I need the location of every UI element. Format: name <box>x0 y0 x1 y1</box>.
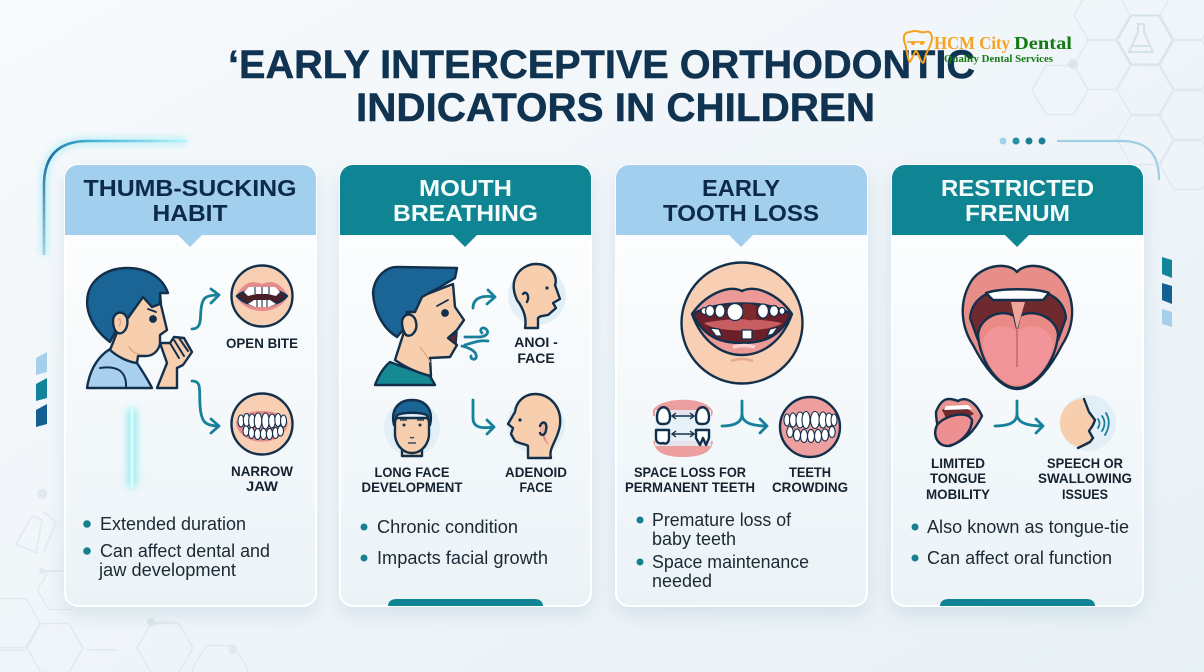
arrow to adenoid face <box>473 400 494 434</box>
panel: restricted frenum <box>892 165 1143 606</box>
header: early tooth loss <box>616 165 867 247</box>
header: restricted frenum <box>892 165 1143 247</box>
icon: mouth with missing teeth <box>682 262 802 384</box>
title: INDICATORS IN CHILDREN <box>356 86 875 130</box>
panel: early tooth loss: PERMANENT TEETH <box>625 479 755 495</box>
bullets: mouth breathing: Impacts facial growth <box>377 548 548 568</box>
bullets: thumb-sucking <box>83 514 270 580</box>
panel: restricted frenum: SWALLOWING <box>1038 470 1132 486</box>
icon: boy sucking thumb <box>87 268 192 388</box>
logo: HCM City Dental: HCM City <box>934 33 1010 53</box>
icon: speech profile <box>1060 395 1116 451</box>
bullets: restricted frenum: Also known as tongue-tie <box>927 517 1129 537</box>
label: long face development: LONG FACE <box>374 464 450 480</box>
header: mouth breathing: BREATHING <box>393 200 538 226</box>
decorative glow bar <box>128 408 136 488</box>
decorative dots and line <box>1000 138 1159 179</box>
panel: mouth breathing: DEVELOPMENT <box>362 479 463 495</box>
icon: adenoid face <box>507 394 565 458</box>
icon: breath lines <box>462 328 488 359</box>
bullets: early tooth loss: Space maintenance <box>652 552 809 572</box>
bullets: early tooth loss: Premature loss of <box>652 510 792 530</box>
logo: HCM City Dental: Dental <box>1014 33 1072 53</box>
label: speech or swallowing issues: SPEECH OR <box>1047 455 1123 471</box>
bullets: thumb-sucking: Can affect dental and <box>100 541 270 561</box>
icon: tongue and frenum <box>963 266 1072 389</box>
bullets: early tooth loss: needed <box>652 571 712 591</box>
title <box>228 43 975 130</box>
icon: teeth crowding <box>780 397 840 457</box>
arrow to anoi face <box>473 290 495 308</box>
icon: open bite mouth <box>232 266 292 326</box>
icon: long face <box>384 400 440 456</box>
label: anoi face: ANOI - <box>514 334 558 350</box>
bullets: restricted frenum <box>912 517 1129 568</box>
bullets: mouth breathing <box>360 517 548 568</box>
panel: mouth breathing: FACE <box>520 479 552 495</box>
header: thumb-sucking: HABIT <box>152 200 228 226</box>
icon: narrow jaw mouth <box>232 394 292 454</box>
header: early tooth loss: TOOTH LOSS <box>663 200 819 226</box>
decorative right swatches <box>1162 257 1172 327</box>
panel: restricted frenum: TONGUE <box>930 470 986 486</box>
decorative glow arc <box>44 141 187 255</box>
label: adenoid face: ADENOID <box>505 464 567 480</box>
panel: mouth breathing <box>340 165 591 606</box>
bullets: early tooth loss <box>636 510 809 591</box>
bullets: restricted frenum: Can affect oral function <box>927 548 1112 568</box>
arrow to narrow jaw <box>192 381 219 433</box>
header: early tooth loss: EARLY <box>702 175 780 201</box>
panel: early tooth loss: CROWDING <box>772 479 848 495</box>
panel: restricted frenum: ISSUES <box>1062 486 1108 502</box>
panel: restricted frenum: MOBILITY <box>926 486 991 502</box>
label: narrow jaw: NARROW <box>231 463 294 479</box>
logo: HCM City Dental <box>904 31 1072 65</box>
bullets: thumb-sucking: Extended duration <box>100 514 246 534</box>
logo: HCM City Dental: Quality Dental Services <box>944 54 1053 65</box>
label: open bite: OPEN BITE <box>226 335 298 351</box>
icon: boy mouth breathing <box>373 267 464 385</box>
footer tab <box>388 599 543 606</box>
header: restricted frenum: FRENUM <box>965 200 1070 226</box>
bullets: thumb-sucking: jaw development <box>98 560 236 580</box>
panel: early tooth loss <box>616 165 867 606</box>
header: restricted frenum: RESTRICTED <box>941 175 1094 201</box>
arrow to speech issues <box>995 401 1043 433</box>
icon: space loss teeth <box>653 400 713 457</box>
panel: thumb-sucking habit <box>65 165 316 606</box>
arrow to open bite <box>192 289 219 329</box>
bullets: mouth breathing: Chronic condition <box>377 517 518 537</box>
header: mouth breathing <box>340 165 591 247</box>
icon: anoi face <box>508 264 566 328</box>
header: thumb-sucking <box>65 165 316 247</box>
label: limited tongue mobility: LIMITED <box>931 455 985 471</box>
header: mouth breathing: MOUTH <box>419 175 512 201</box>
decorative left swatches <box>36 352 47 427</box>
arrow to teeth crowding <box>722 401 767 433</box>
label: space loss for permanent teeth: SPACE LOSS FOR <box>634 464 746 480</box>
panel: mouth breathing: FACE <box>517 350 555 366</box>
header: thumb-sucking: THUMB-SUCKING <box>84 175 296 201</box>
panel: thumb-sucking habit: JAW <box>246 478 279 494</box>
label: teeth crowding: TEETH <box>789 464 831 480</box>
footer tab <box>940 599 1095 606</box>
icon: small tongue <box>935 399 982 446</box>
bullets: early tooth loss: baby teeth <box>652 529 736 549</box>
title: ‘EARLY INTERCEPTIVE ORTHODONTIC <box>228 43 975 87</box>
